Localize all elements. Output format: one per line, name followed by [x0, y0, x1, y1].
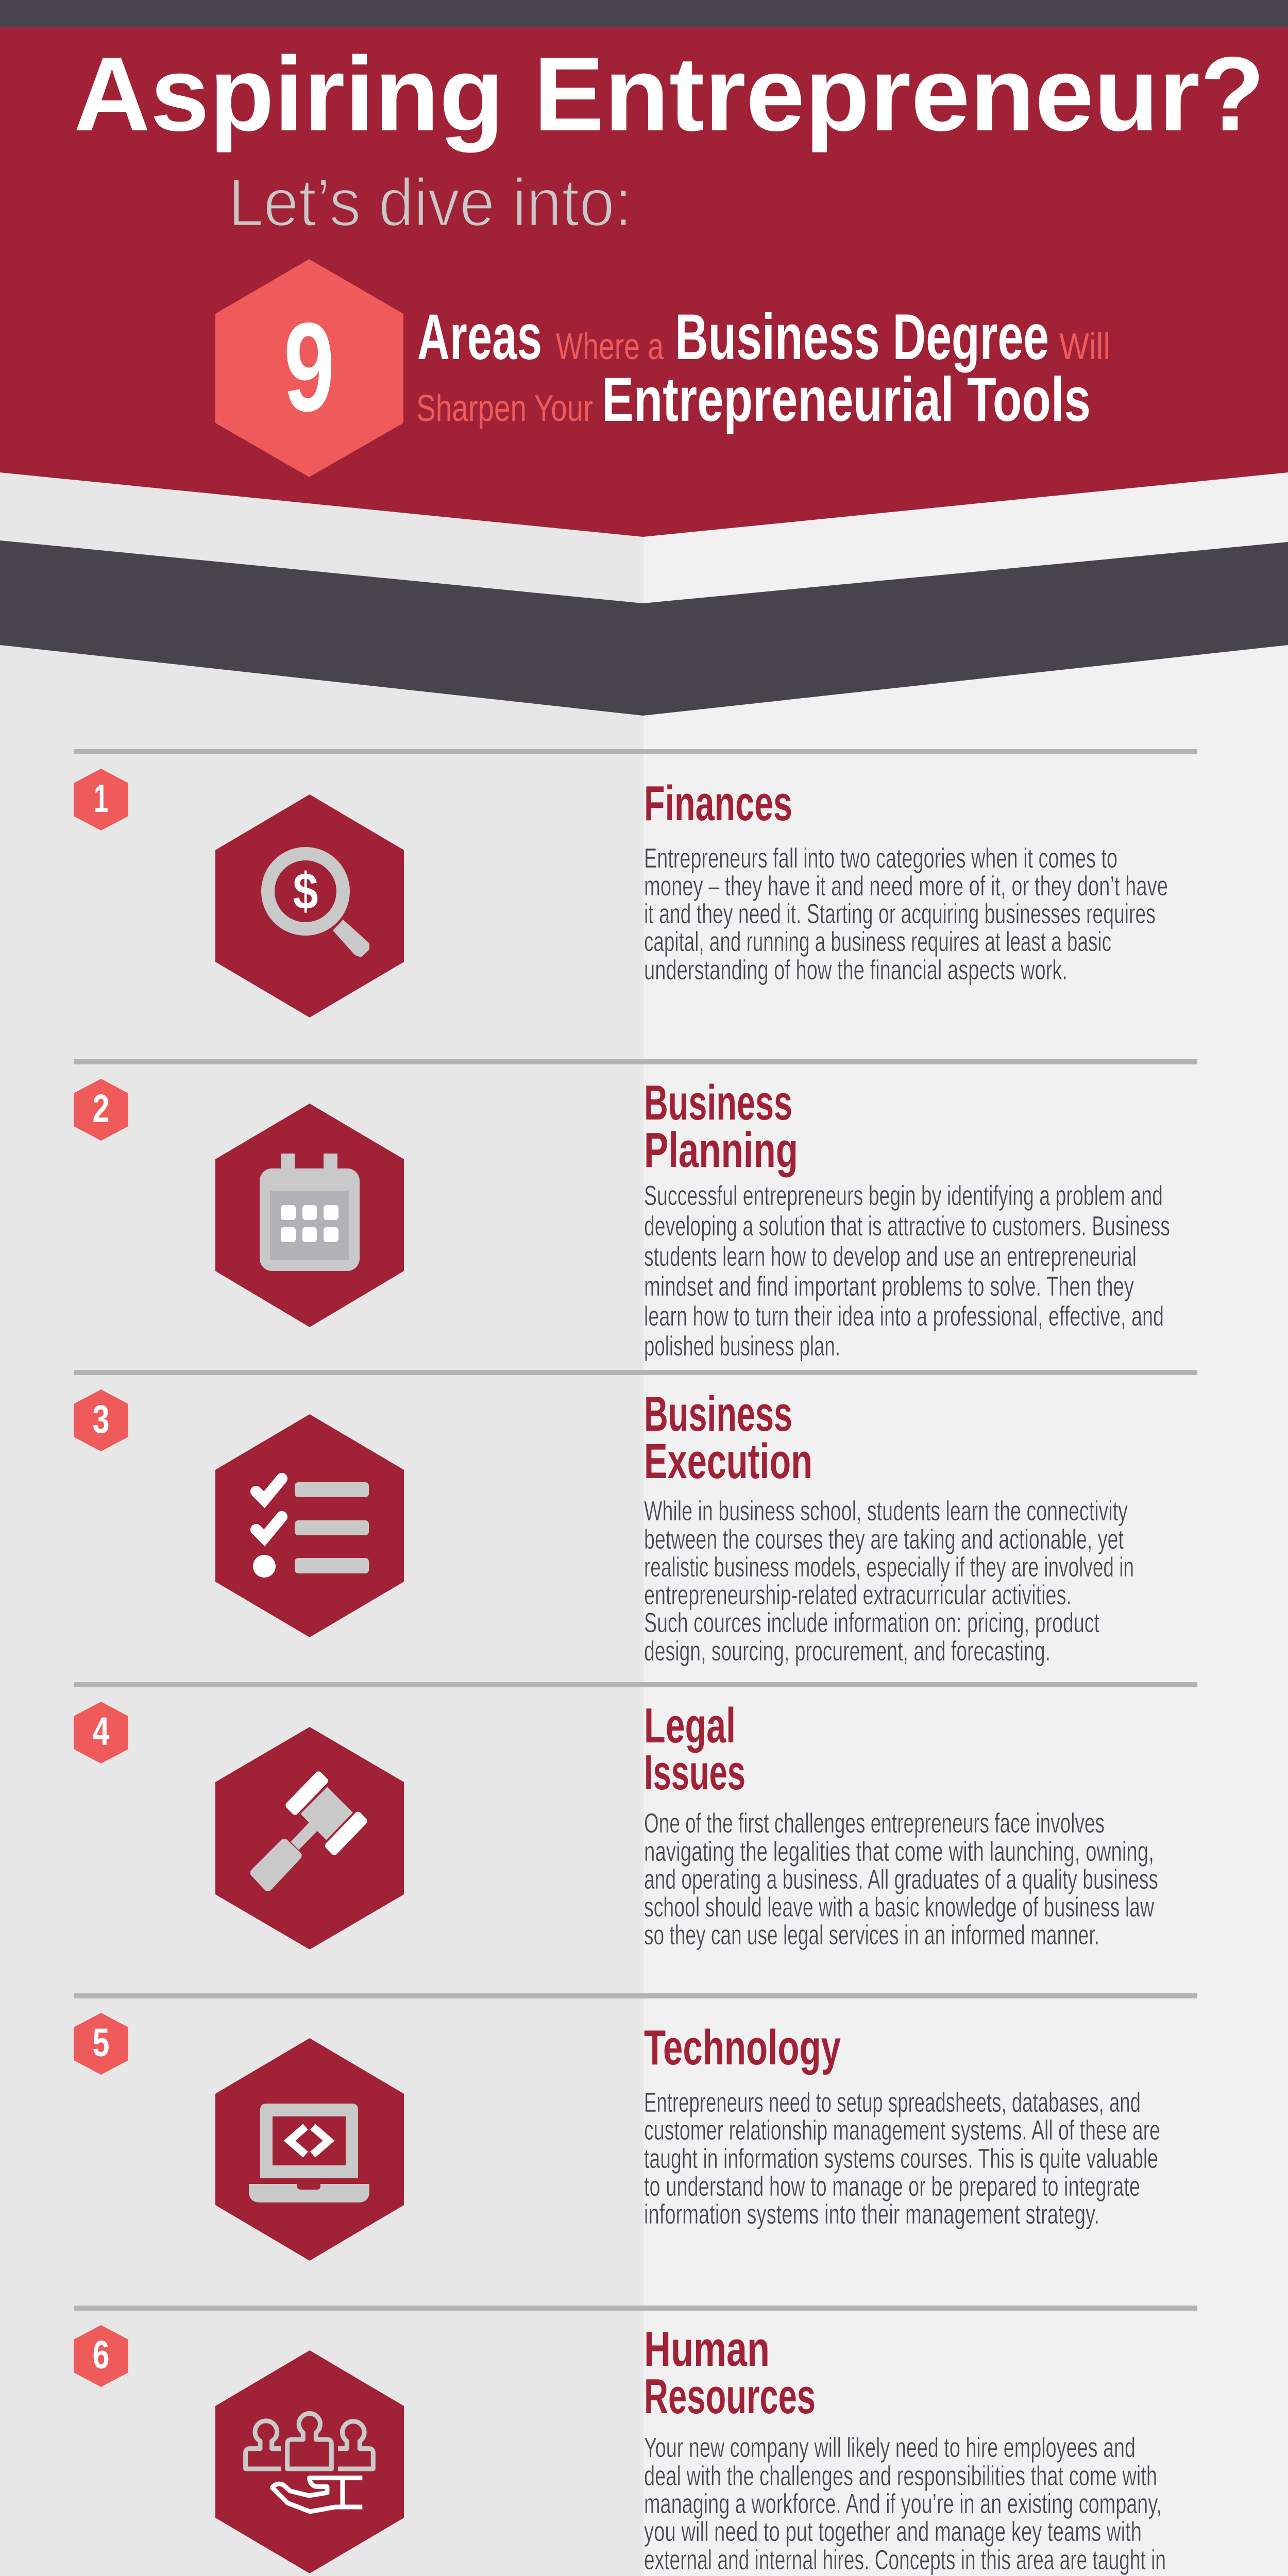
icon: team in hand — [215, 2350, 404, 2573]
body text — [644, 1180, 1170, 1362]
body text: design, sourcing, procurement, and forecasting. — [644, 1636, 1050, 1667]
body text: understanding of how the financial aspects work. — [644, 955, 1067, 986]
body text — [644, 2087, 1160, 2230]
badge 5: 5 — [93, 2021, 109, 2065]
heading: Planning — [644, 1123, 798, 1178]
body text: information systems into their management strategy. — [644, 2199, 1099, 2230]
headline line 1: Areas — [417, 301, 542, 373]
badge 3 — [74, 1389, 128, 1451]
title: Aspiring Entrepreneur? — [74, 35, 1265, 153]
badge 4: 4 — [93, 1709, 110, 1754]
badge 6 — [74, 2325, 128, 2387]
icon: checklist — [215, 1414, 404, 1637]
headline line 2: Sharpen Your — [416, 388, 593, 429]
badge 1 — [74, 769, 128, 831]
icon: magnifier with dollar — [215, 794, 404, 1018]
body text — [644, 2432, 1166, 2576]
heading: Legal — [644, 1698, 736, 1753]
icon: gavel — [215, 1727, 404, 1950]
heading — [644, 1386, 812, 1489]
badge 2: 2 — [93, 1087, 109, 1131]
panel: business execution — [74, 1370, 1197, 1667]
panel: finances — [74, 749, 1197, 1018]
heading: Resources — [644, 2369, 816, 2424]
heading — [644, 2321, 816, 2424]
heading: Human — [644, 2321, 770, 2377]
badge 5 — [74, 2013, 128, 2075]
body text — [644, 1496, 1134, 1667]
body text — [644, 1808, 1158, 1951]
body text: Such cources include information on: pricing, product — [644, 1607, 1099, 1638]
body text — [644, 843, 1168, 986]
hexagon: 9 — [215, 259, 403, 477]
badge 4 — [74, 1702, 128, 1764]
headline line 1: Business Degree — [675, 301, 1049, 373]
heading: Finances — [644, 776, 792, 831]
panel: legal issues — [74, 1682, 1197, 1951]
heading: Business — [644, 1386, 792, 1442]
headline line 2 — [416, 364, 1091, 434]
heading: Technology — [644, 2020, 841, 2075]
header banner — [0, 0, 1288, 716]
body text: so they can use legal services in an informed manner. — [644, 1920, 1099, 1951]
icon: laptop — [215, 2038, 404, 2261]
badge 2 — [74, 1079, 128, 1141]
headline line 1: Will — [1059, 326, 1110, 367]
panel: human resources — [74, 2306, 1197, 2576]
hexagon: 9: 9 — [283, 296, 335, 437]
panel: technology — [74, 1993, 1197, 2261]
headline line 1: Where a — [556, 326, 664, 367]
badge 6: 6 — [93, 2333, 109, 2377]
badge 3: 3 — [93, 1397, 109, 1442]
icon: magnifier with dollar: $ — [293, 862, 318, 920]
headline line 1 — [417, 301, 1110, 373]
headline line 2: Entrepreneurial Tools — [602, 364, 1091, 434]
heading: Issues — [644, 1745, 745, 1800]
badge 1: 1 — [94, 776, 108, 821]
heading: Business — [644, 1075, 792, 1130]
body text: entrepreneurship-related extracurricular activities. — [644, 1580, 1072, 1611]
panel: business planning — [74, 1059, 1197, 1362]
heading — [644, 1075, 798, 1178]
heading — [644, 1698, 745, 1800]
icon: calendar — [215, 1104, 404, 1327]
subtitle: Let’s dive into: — [228, 164, 632, 240]
heading: Execution — [644, 1434, 812, 1489]
body text: polished business plan. — [644, 1331, 840, 1362]
